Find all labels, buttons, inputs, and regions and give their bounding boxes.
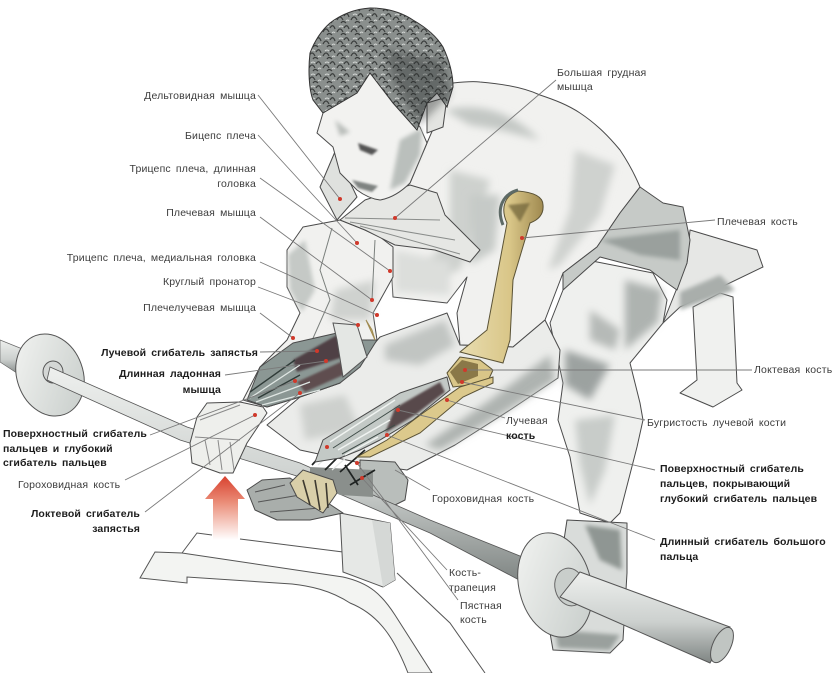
label: triceps medial head: Трицепс плеча, медиальная головка — [67, 252, 256, 264]
label: radius: Лучевая — [506, 415, 548, 427]
right plate — [507, 525, 738, 666]
label: superficial flexor: глубокий сгибатель пальцев — [660, 493, 818, 505]
label: pronator teres: Круглый пронатор — [163, 276, 256, 288]
hair — [309, 8, 453, 130]
deltoid — [320, 147, 357, 220]
label: pisiform: Гороховидная кость — [18, 479, 121, 491]
label: finger flexors: Поверхностный сгибатель — [3, 428, 147, 440]
label: brachialis: Плечевая мышца — [166, 207, 256, 219]
red arrow — [205, 476, 245, 540]
face — [317, 73, 427, 200]
label: palmaris longus: мышца — [183, 384, 221, 396]
label: humerus: Плечевая кость — [717, 216, 798, 228]
labels: left column — [3, 90, 258, 535]
right shoe — [550, 520, 627, 653]
chest muscle — [340, 185, 480, 262]
label: pectoralis major: мышца — [557, 81, 593, 93]
label: triceps long head: Трицепс плеча, длинная — [129, 163, 256, 175]
label: trapezium: трапеция — [449, 582, 496, 594]
label: metacarpal: Пястная — [460, 600, 502, 612]
left upper arm — [243, 220, 393, 407]
label: finger flexors: сгибатель пальцев — [3, 457, 107, 469]
right hand and wrist tendons — [290, 440, 375, 513]
label: deltoid: Дельтовидная мышца — [144, 90, 256, 102]
label: triceps long head: головка — [217, 178, 256, 190]
shorts — [563, 187, 690, 290]
knee behind hand — [360, 460, 408, 510]
right forearm — [315, 377, 450, 462]
ear — [427, 97, 447, 133]
left thigh — [267, 313, 560, 470]
label: flexor pollicis longus: Длинный сгибатель большого — [660, 536, 826, 548]
label: ulna: Локтевая кость — [754, 364, 833, 376]
label: pectoralis major: Большая грудная — [557, 67, 646, 79]
leader lines — [125, 80, 752, 600]
left shoe — [247, 478, 343, 520]
left forearm muscles — [247, 320, 377, 407]
label: palmaris longus: Длинная ладонная — [119, 368, 221, 380]
label: flexor carpi ulnaris: запястья — [92, 523, 140, 535]
label: superficial flexor: пальцев, покрывающий — [660, 478, 790, 490]
humerus and forearm bones — [357, 190, 543, 457]
head — [309, 8, 453, 200]
left plate and bar stub — [0, 324, 95, 426]
label: flexor carpi ulnaris: Локтевой сгибатель — [31, 508, 140, 520]
label: flexor carpi radialis: Лучевой сгибатель запястья — [101, 347, 258, 359]
label: trapezium: Кость- — [449, 567, 481, 579]
torso and rear arm — [340, 82, 640, 347]
barbell bar — [47, 367, 530, 582]
label: metacarpal: кость — [460, 614, 487, 626]
label: superficial flexor: Поверхностный сгибатель — [660, 463, 804, 475]
right leg — [550, 260, 667, 523]
label: radial tuberosity: Бугристость лучевой кости — [647, 417, 786, 429]
label: brachioradialis: Плечелучевая мышца — [143, 302, 256, 314]
red marker dots — [253, 197, 524, 480]
left hand — [190, 402, 267, 473]
label: flexor pollicis longus: пальца — [660, 551, 698, 563]
label: radius: кость — [506, 430, 536, 442]
bench seat — [663, 230, 763, 407]
label: finger flexors: пальцев и глубокий — [3, 443, 113, 455]
label: pisiform right: Гороховидная кость — [432, 493, 535, 505]
label: biceps: Бицепс плеча — [185, 130, 256, 142]
bench base frame — [140, 513, 485, 673]
labels: right column — [432, 67, 833, 626]
